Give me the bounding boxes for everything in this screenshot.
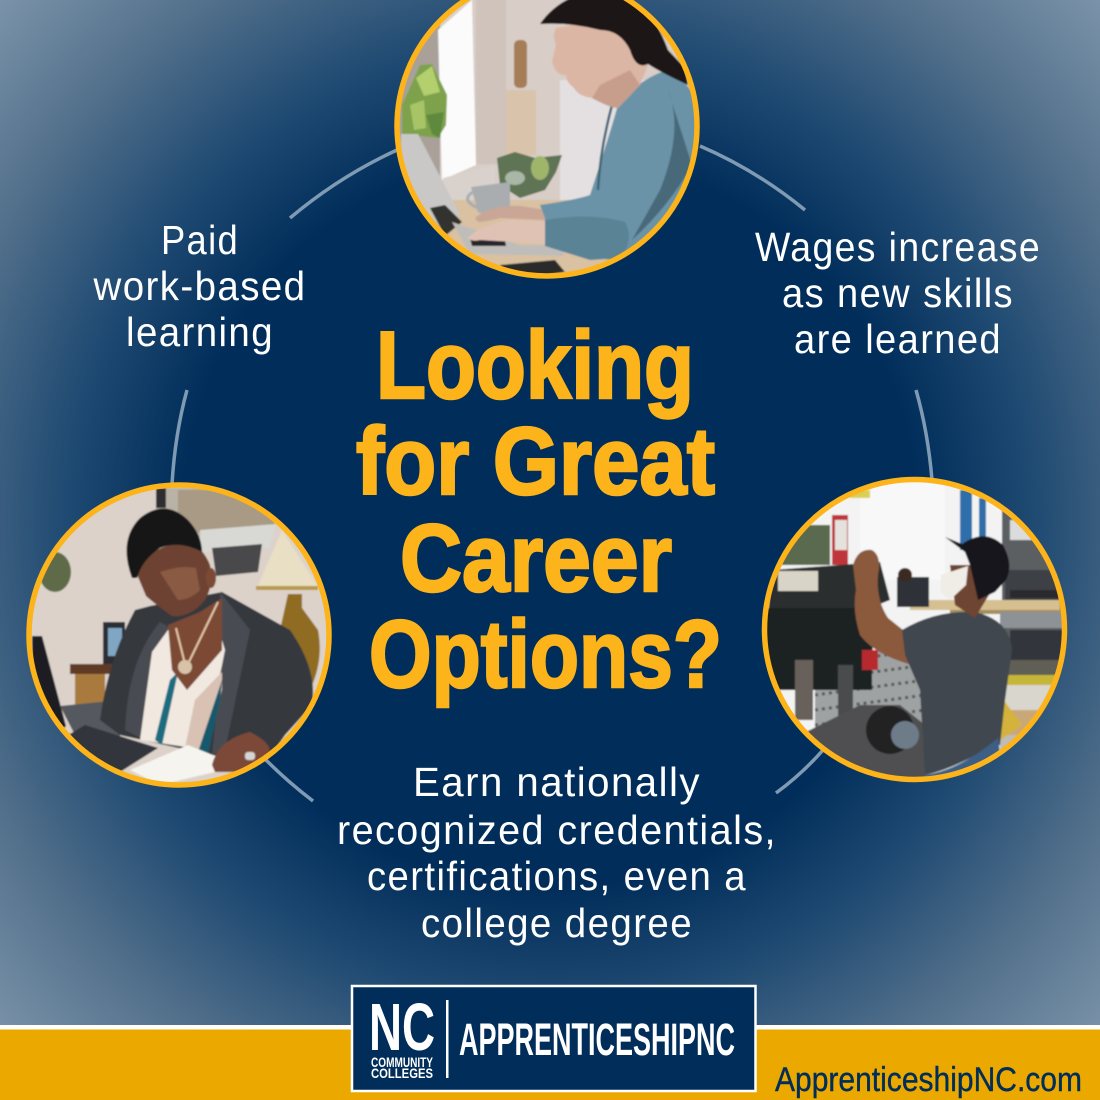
text: wages increase bbox=[755, 224, 1041, 362]
text: wages increase: are learned bbox=[794, 316, 1002, 362]
text: earn credentials bbox=[337, 759, 777, 946]
text: paid work-based learning: work-based bbox=[93, 263, 306, 309]
text: earn credentials: Earn nationally bbox=[413, 759, 701, 805]
logo: NC: NC bbox=[369, 990, 435, 1065]
logo box bbox=[352, 986, 756, 1091]
text: wages increase: as new skills bbox=[782, 270, 1014, 316]
text: earn credentials: college degree bbox=[421, 900, 693, 946]
connecting ring arcs bbox=[172, 146, 932, 801]
text: wages increase: Wages increase bbox=[755, 224, 1041, 270]
main heading: for Great bbox=[356, 408, 715, 515]
logo: community colleges: COMMUNITY bbox=[371, 1054, 433, 1070]
logo: community colleges: COLLEGES bbox=[371, 1065, 433, 1081]
text: earn credentials: certifications, even a bbox=[367, 853, 747, 899]
footer band bbox=[0, 1025, 1100, 1100]
main heading bbox=[356, 312, 722, 708]
logo: apprenticeshipNC: APPRENTICESHIPNC bbox=[459, 1014, 735, 1065]
photo: woman typing on a laptop bbox=[395, 0, 700, 280]
main heading: Career bbox=[400, 505, 672, 612]
text: paid work-based learning bbox=[93, 217, 306, 355]
text: paid work-based learning: Paid bbox=[161, 217, 239, 263]
text: paid work-based learning: learning bbox=[126, 309, 274, 355]
text: earn credentials: recognized credentials, bbox=[337, 807, 777, 853]
logo: community colleges bbox=[371, 1054, 433, 1081]
photo: masked worker at a drill press bbox=[762, 478, 1070, 790]
main heading: Looking bbox=[376, 312, 694, 419]
photo: woman in blazer reviewing paperwork bbox=[27, 483, 331, 787]
main heading: Options? bbox=[369, 601, 722, 708]
